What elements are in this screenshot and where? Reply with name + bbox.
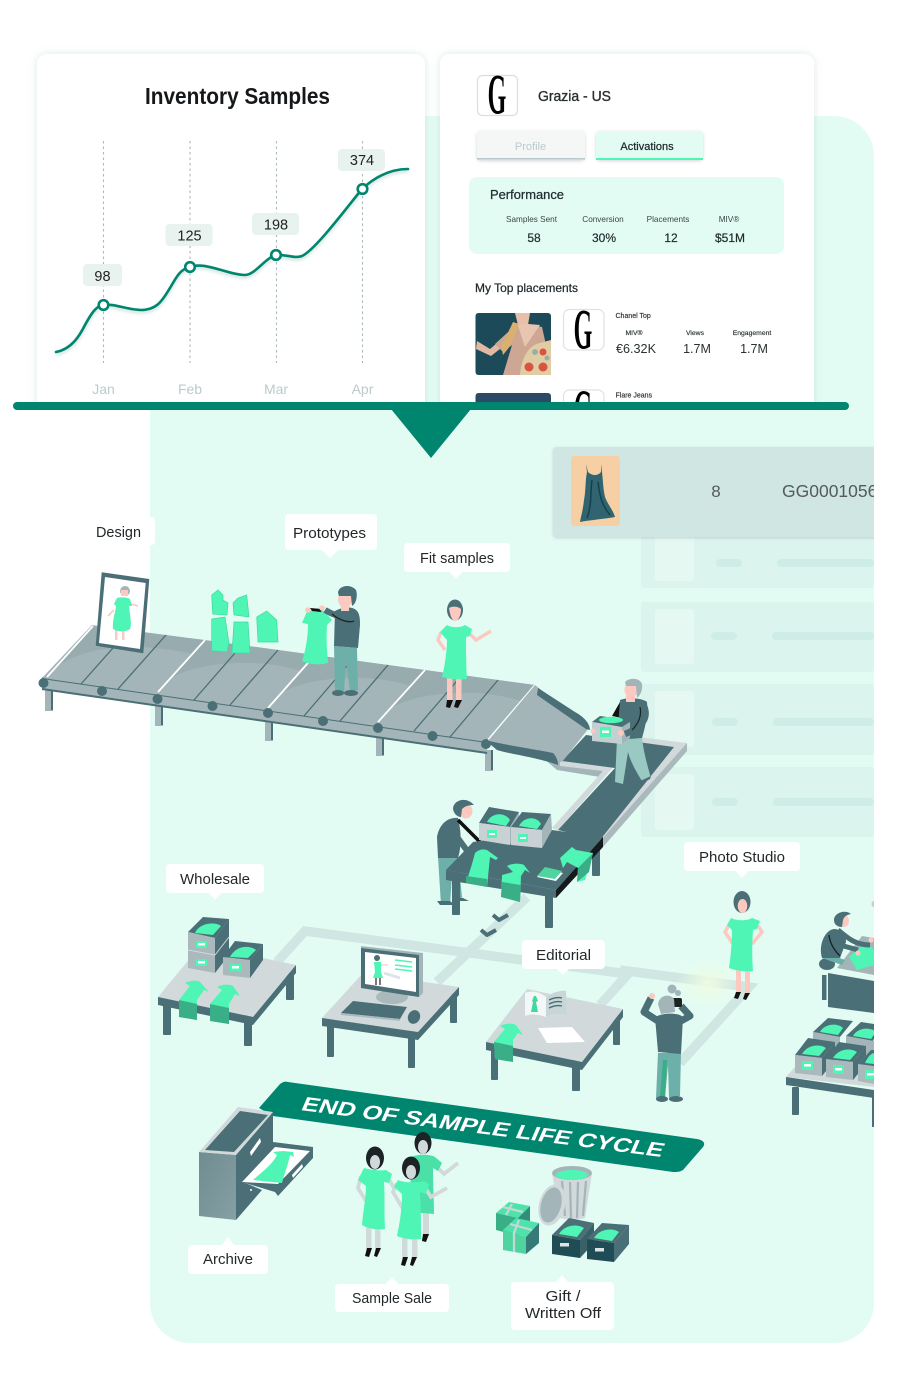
placement: Chanel Top stats: Views (686, 330, 705, 337)
tab: Profile (477, 131, 585, 160)
placement: Chanel Top stats: MIV® (625, 329, 643, 337)
dress thumbnail (571, 456, 620, 526)
line chart: 125 (177, 228, 202, 244)
label: Wholesale (166, 864, 264, 900)
rail side (42, 678, 487, 753)
lower belt frame (602, 738, 687, 838)
tab: Activations: Activations (620, 141, 674, 153)
icon: garment pattern pieces (212, 590, 278, 653)
panel: Grazia US activations card (438, 52, 816, 402)
icon: computer with model on screen (341, 946, 423, 1026)
icon: gift boxes (496, 1202, 539, 1254)
tab: Activations (596, 131, 703, 160)
line chart (56, 141, 408, 397)
icon: editorial magazine and paper (525, 991, 585, 1043)
logo: Grazia small second row (563, 390, 604, 402)
panel: performance metrics: $51M (715, 231, 745, 245)
label: Design: Design (96, 524, 141, 541)
figure: photographer (644, 984, 690, 1102)
label: Editorial (522, 940, 605, 975)
highlighted table row (553, 447, 884, 537)
placement photo (476, 313, 551, 375)
front row boxes (795, 1038, 874, 1084)
label: Gift / Written Off: Written Off (525, 1305, 602, 1322)
label: Photo Studio: Photo Studio (699, 849, 785, 866)
line chart: Mar (264, 381, 288, 397)
logo: Grazia small: G (574, 298, 592, 362)
belt surface (42, 625, 535, 742)
line chart: Jan (92, 381, 115, 397)
banner: end of sample life cycle: END OF SAMPLE LIFE CYCLE (298, 1094, 668, 1162)
icon: design picture frame (96, 572, 149, 653)
label: Photo Studio (684, 842, 800, 878)
line chart: 98 (94, 269, 111, 285)
panel: performance metrics: MIV® (719, 215, 739, 224)
line chart: Apr (352, 381, 374, 397)
icon: trash bin with lid (534, 1166, 592, 1229)
icon: wholesale shirts (179, 981, 240, 1024)
table: editorial table (486, 989, 623, 1091)
logo: Grazia small second row: G (574, 378, 592, 442)
row quantity: 8 (711, 482, 721, 501)
studio light glow (684, 971, 732, 996)
tab: Profile: Profile (515, 141, 546, 153)
label: Archive (188, 1237, 268, 1274)
row sample code: GG0001056 (782, 481, 877, 501)
rollers (38, 678, 491, 749)
label: Editorial: Editorial (536, 947, 591, 964)
panel: performance metrics (469, 177, 784, 254)
arrow pointing down (391, 409, 471, 458)
label: Fit samples (404, 543, 510, 579)
panel: inventory samples chart card (34, 52, 428, 402)
icon: editorial shirt (494, 1024, 523, 1062)
conveyor legs (45, 690, 493, 771)
label: Sample Sale (335, 1277, 449, 1312)
table: wholesale table (158, 945, 296, 1046)
placement photo: second row (476, 393, 551, 402)
illustration: main conveyor belt (38, 625, 687, 847)
mint background panel (150, 116, 874, 1343)
icon: shirts on folding table (466, 847, 593, 902)
placement: Chanel Top stats (616, 313, 771, 356)
icon: wholesale stacked boxes (188, 917, 263, 978)
label: Prototypes (285, 514, 377, 558)
label: Design (82, 517, 155, 545)
line chart: Feb (178, 381, 202, 397)
logo: Grazia (477, 74, 518, 116)
panel: performance metrics: 30% (592, 231, 616, 245)
heading: Inventory Samples: Inventory Samples (145, 83, 330, 109)
panel: performance metrics: Samples Sent (506, 215, 558, 224)
panel: performance metrics: 12 (664, 231, 678, 245)
figure: seated seamstress and table (819, 900, 878, 1013)
heading: My Top placements: My Top placements (475, 281, 578, 295)
faded table rows (641, 530, 874, 837)
woman back (410, 1132, 458, 1242)
label: Gift / Written Off: Gift / (546, 1288, 581, 1305)
chevrons on path (481, 915, 508, 935)
figure: man holding prototype dress (302, 586, 360, 696)
label: Wholesale: Wholesale (180, 871, 250, 888)
table: folding table (446, 830, 603, 928)
logo: Grazia: G (488, 63, 506, 127)
figure: sample sale women group (358, 1132, 458, 1266)
placement: Flare Jeans: Flare Jeans (616, 392, 653, 400)
woman front (393, 1156, 447, 1266)
line chart: 198 (264, 218, 288, 234)
banner: end of sample life cycle (259, 1082, 704, 1172)
logo: Grazia small (563, 309, 604, 350)
panel: performance metrics: Performance (490, 188, 564, 202)
figure: photo studio model (725, 891, 762, 1000)
figure: man carrying box (590, 679, 651, 784)
brand name: Grazia - US (538, 88, 611, 105)
label: Prototypes: Prototypes (293, 525, 366, 542)
ramp support (547, 760, 602, 777)
panel: performance metrics: Conversion (582, 215, 624, 224)
placement: Chanel Top stats: €6.32K (616, 342, 657, 356)
panel: performance metrics: 58 (527, 231, 541, 245)
back row boxes (813, 1018, 880, 1056)
downward ramp (487, 685, 589, 762)
label: Archive: Archive (203, 1251, 253, 1268)
table: computer desk (322, 973, 459, 1068)
woman left (358, 1146, 394, 1257)
label: Gift / Written Off (511, 1275, 614, 1330)
belt slats (81, 630, 498, 737)
line chart: 374 (350, 153, 374, 169)
icon: boxes on folding table (479, 807, 552, 848)
label: Sample Sale: Sample Sale (352, 1290, 432, 1307)
floor path lines (277, 897, 749, 1063)
table: right stock table with boxes (786, 1018, 880, 1127)
placement: Chanel Top stats: Engagement (733, 330, 771, 337)
figure: man folding at table (437, 800, 483, 905)
figure: fit sample woman (438, 600, 491, 708)
placement: Chanel Top stats: 1.7M (740, 342, 768, 356)
label: Fit samples: Fit samples (420, 550, 494, 567)
placement: Chanel Top stats: 1.7M (683, 342, 711, 356)
placement: Chanel Top stats: Chanel Top (616, 313, 651, 320)
icon: archive cabinet with drawer (199, 1107, 313, 1220)
panel: performance metrics: Placements (647, 215, 689, 224)
icon: dark closed boxes (552, 1218, 629, 1262)
divider bar (13, 402, 849, 410)
